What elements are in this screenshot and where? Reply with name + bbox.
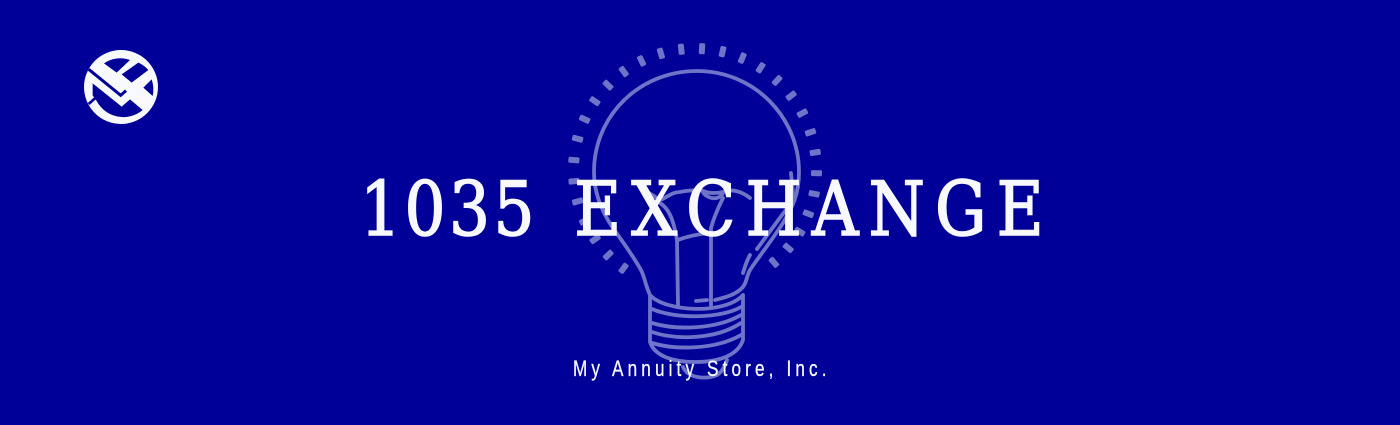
bulb glass outline [594, 71, 799, 300]
subtitle: My Annuity Store, Inc. [573, 357, 827, 382]
filament [647, 190, 750, 305]
rays around bulb [568, 43, 822, 275]
title [360, 166, 1044, 253]
icon: light bulb illustration [568, 43, 822, 378]
title: 1035 [360, 166, 535, 253]
icon: company logo [84, 50, 158, 124]
title: EXCHANGE [574, 166, 1044, 253]
screw base threads [650, 295, 743, 378]
bulb inner highlight [743, 173, 793, 273]
